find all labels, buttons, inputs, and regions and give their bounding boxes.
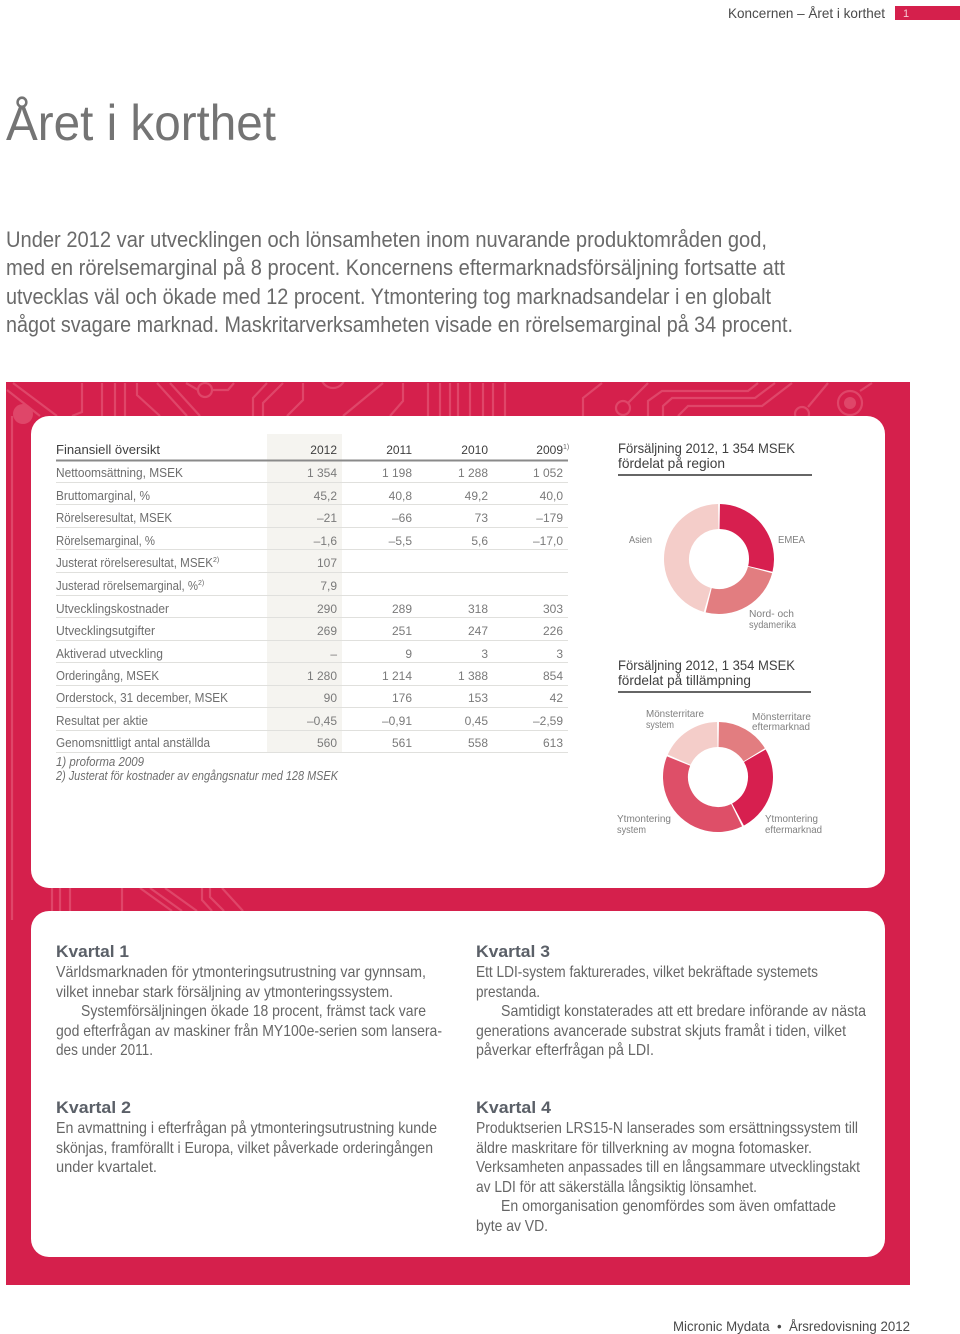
heading: sales by application: fördelat på tillämpning	[618, 672, 751, 688]
table footnotes: 1) proforma 2009	[56, 755, 144, 769]
row: Utvecklingsutgifter: 247	[468, 624, 488, 638]
row: Nettoomsättning: 1 198	[382, 466, 412, 480]
row: Nettoomsättning: 1 288	[458, 466, 488, 480]
row: Orderingång	[56, 669, 563, 683]
row: Utvecklingsutgifter: 226	[543, 624, 563, 638]
row: Utvecklingskostnader: 289	[392, 602, 412, 616]
text block: Kvartal 1: Kvartal 1	[56, 942, 129, 961]
donut labels: region: sydamerika	[749, 619, 796, 631]
text block: Kvartal 1: Systemförsäljningen ökade 18 procent, främst tack vare	[81, 1003, 426, 1020]
row: Nettoomsättning	[56, 466, 563, 480]
heading: sales by region: Försäljning 2012, 1 354 MSEK	[618, 440, 796, 456]
row: Rörelsemarginal: –1,6	[314, 534, 337, 548]
text block: Kvartal 1: Världsmarknaden för ytmonteringsutrustning var gynnsam,	[56, 964, 426, 981]
page footer: Micronic Mydata • Årsredovisning 2012	[673, 1318, 910, 1334]
row: Orderingång: 1 214	[382, 669, 412, 683]
donut labels: application: system	[617, 824, 646, 836]
page header: 1	[903, 8, 909, 20]
row: Orderstock: 176	[392, 691, 412, 705]
row: Rörelsemarginal: –17,0	[533, 534, 563, 548]
donut labels: application: eftermarknad	[765, 824, 822, 836]
row: Orderstock	[56, 691, 563, 705]
text block: Kvartal 4: av LDI för att säkerställa långsiktig lönsamhet.	[476, 1178, 757, 1196]
donut chart: sales by region	[666, 506, 772, 612]
row: Orderingång: Orderingång, MSEK	[56, 669, 160, 683]
financial table	[55, 434, 569, 783]
text block: Kvartal 1: god efterfrågan av maskiner från MY100e-serien som lansera-	[56, 1022, 442, 1040]
row: Rörelseresultat: –179	[536, 511, 563, 525]
text block: Kvartal 1: vilket innebar stark försäljning av ytmonteringssystem.	[56, 984, 393, 1001]
row: Orderingång: 1 388	[458, 669, 488, 683]
donut labels: application: system	[646, 719, 674, 731]
donut labels: application: Ytmontering	[765, 813, 818, 825]
row: Bruttomarginal: 40,0	[540, 489, 563, 503]
row: Bruttomarginal	[56, 489, 563, 503]
row: Utvecklingskostnader: Utvecklingskostnader	[56, 602, 169, 616]
table header: 2010	[461, 443, 488, 457]
page header: Koncernen – Året i korthet	[728, 5, 885, 21]
row: Justerad rörelsemarginal	[56, 579, 337, 593]
row: Utvecklingskostnader	[56, 602, 563, 616]
row: Resultat per aktie: –2,59	[533, 714, 563, 728]
row: Utvecklingsutgifter: 269	[317, 624, 337, 638]
row: Rörelseresultat: –21	[317, 511, 337, 525]
text block: Kvartal 4: Kvartal 4	[476, 1098, 552, 1117]
row: Utvecklingskostnader: 303	[543, 602, 563, 616]
text block: Kvartal 2	[56, 1098, 437, 1176]
red background panel	[6, 382, 910, 1285]
row: Justerad rörelsemarginal: 2)	[198, 580, 204, 587]
donut labels: region	[629, 534, 805, 631]
row: Aktiverad utveckling: –	[330, 647, 337, 661]
table header	[56, 443, 569, 457]
row: Resultat per aktie: –0,45	[307, 714, 337, 728]
row: Aktiverad utveckling: 3	[556, 647, 563, 661]
row: Orderingång: 1 280	[307, 669, 337, 683]
row: Rörelseresultat	[56, 511, 563, 525]
row: Justerad rörelsemarginal: 7,9	[320, 579, 337, 593]
row: Orderingång: 854	[543, 669, 563, 683]
table footnotes	[55, 755, 339, 783]
row: Bruttomarginal: 49,2	[465, 489, 488, 503]
heading: sales by application: Försäljning 2012, 1 354 MSEK	[618, 657, 796, 673]
donut labels: region: EMEA	[778, 534, 805, 546]
row: Orderstock: 153	[468, 691, 488, 705]
table header: 2012	[310, 443, 337, 457]
table footnotes: 2) Justerat för kostnader av engångsnatur med 128 MSEK	[55, 769, 339, 783]
row: Rörelsemarginal: Rörelsemarginal, %	[56, 534, 155, 548]
row: Genomsnittligt antal anställda: 613	[543, 736, 563, 750]
text block: Kvartal 4: Verksamheten anpassades till en långsammare utvecklingstakt	[476, 1158, 860, 1176]
donut labels: application: Mönsterritare	[752, 711, 811, 723]
row: Rörelseresultat: Rörelseresultat, MSEK	[56, 511, 173, 525]
heading: sales by application	[618, 657, 811, 693]
row: Aktiverad utveckling	[56, 647, 563, 661]
donut labels: application: Mönsterritare	[646, 708, 704, 720]
donut labels: application: eftermarknad	[752, 721, 810, 733]
panel: quarterly summaries	[31, 911, 885, 1257]
row: Utvecklingsutgifter	[56, 624, 563, 638]
row: Utvecklingskostnader: 290	[317, 602, 337, 616]
text block: Kvartal 4: En omorganisation genomfördes som även omfattade	[501, 1198, 836, 1215]
row: Bruttomarginal: 40,8	[389, 489, 412, 503]
row: Justerat rörelseresultat: 2)	[213, 557, 219, 564]
row: Justerat rörelseresultat: Justerat rörelseresultat, MSEK	[56, 556, 214, 570]
text block: Kvartal 3: Kvartal 3	[476, 942, 550, 961]
donut labels: application	[617, 708, 822, 836]
row: Justerad rörelsemarginal: Justerad rörelsemarginal, %	[56, 579, 198, 593]
text block: Kvartal 3: prestanda.	[476, 984, 540, 1001]
text block: Kvartal 3: Samtidigt konstaterades att ett bredare införande av nästa	[501, 1003, 866, 1020]
row: Genomsnittligt antal anställda: 558	[468, 736, 488, 750]
text block: Kvartal 2: Kvartal 2	[56, 1098, 131, 1117]
title: Året i korthet	[6, 95, 276, 151]
row: Justerat rörelseresultat	[56, 556, 337, 570]
text block: Kvartal 2: under kvartalet.	[56, 1159, 157, 1176]
row: Orderstock: 42	[550, 691, 563, 705]
row: Rörelsemarginal: 5,6	[471, 534, 488, 548]
donut labels: application: Ytmontering	[617, 813, 671, 825]
text block: Kvartal 2: skönjas, framförallt i Europa, vilket påverkade orderingången	[56, 1139, 433, 1157]
row: Resultat per aktie: –0,91	[382, 714, 412, 728]
row: Rörelseresultat: 73	[475, 511, 488, 525]
row: Nettoomsättning: 1 354	[307, 466, 337, 480]
intro text	[6, 227, 793, 337]
intro text: något svagare marknad. Maskritarverksamheten visade en rörelsemarginal på 34 procent.	[6, 312, 793, 337]
row: Aktiverad utveckling: 9	[405, 647, 412, 661]
intro text: med en rörelsemarginal på 8 procent. Koncernens eftermarknadsförsäljning fortsatte att	[6, 255, 786, 280]
donut labels: region: Nord- och	[749, 608, 794, 620]
row: Genomsnittligt antal anställda: 560	[317, 736, 337, 750]
table header: Finansiell översikt	[56, 443, 161, 457]
row: Nettoomsättning: 1 052	[533, 466, 563, 480]
row: Rörelsemarginal: –5,5	[389, 534, 412, 548]
row: Genomsnittligt antal anställda: Genomsnittligt antal anställda	[56, 736, 210, 750]
text block: Kvartal 1	[56, 942, 442, 1059]
table header: 2011	[386, 443, 412, 457]
table header: 2009	[536, 443, 563, 457]
row: Resultat per aktie: Resultat per aktie	[56, 714, 148, 728]
row: Rörelseresultat: –66	[392, 511, 412, 525]
text block: Kvartal 3	[476, 942, 866, 1059]
heading: sales by region: fördelat på region	[618, 455, 725, 471]
text block: Kvartal 3: påverkar efterfrågan på LDI.	[476, 1041, 654, 1059]
intro text: utvecklas väl och ökade med 12 procent. Ytmontering tog marknadsandelar i en globalt	[6, 284, 772, 309]
row: Resultat per aktie	[56, 714, 563, 728]
panel: financial overview and sales charts	[31, 416, 885, 888]
text block: Kvartal 4: byte av VD.	[476, 1218, 548, 1235]
row: Justerat rörelseresultat: 107	[317, 556, 337, 570]
text block: Kvartal 4	[476, 1098, 860, 1235]
row: Utvecklingsutgifter: Utvecklingsutgifter	[56, 624, 155, 638]
text block: Kvartal 3: Ett LDI-system fakturerades, vilket bekräftade systemets	[476, 964, 818, 981]
row: Rörelsemarginal	[56, 534, 563, 548]
row: Bruttomarginal: 45,2	[314, 489, 337, 503]
row: Aktiverad utveckling: Aktiverad utveckling	[56, 647, 163, 661]
row: Orderstock: 90	[324, 691, 337, 705]
row: Nettoomsättning: Nettoomsättning, MSEK	[56, 466, 184, 480]
row: Genomsnittligt antal anställda: 561	[392, 736, 412, 750]
donut chart: sales by application	[660, 719, 776, 835]
row: Bruttomarginal: Bruttomarginal, %	[56, 489, 150, 503]
row: Utvecklingskostnader: 318	[468, 602, 488, 616]
heading: sales by region	[618, 440, 812, 476]
table header: 1)	[563, 444, 569, 451]
row: Orderstock: Orderstock, 31 december, MSEK	[56, 691, 229, 705]
row: Aktiverad utveckling: 3	[481, 647, 488, 661]
row: Utvecklingsutgifter: 251	[392, 624, 412, 638]
text block: Kvartal 4: äldre maskritare för tillverkning av mogna fotomasker.	[476, 1140, 812, 1157]
text block: Kvartal 2: En avmattning i efterfrågan på ytmonteringsutrustning kunde	[56, 1119, 437, 1137]
text block: Kvartal 4: Produktserien LRS15-N lanserades som ersättningssystem till	[476, 1120, 858, 1137]
row: Genomsnittligt antal anställda	[56, 736, 563, 750]
row: Resultat per aktie: 0,45	[465, 714, 488, 728]
donut labels: region: Asien	[629, 534, 652, 546]
text block: Kvartal 1: des under 2011.	[56, 1042, 153, 1059]
intro text: Under 2012 var utvecklingen och lönsamheten inom nuvarande produktområden god,	[6, 227, 767, 252]
text block: Kvartal 3: generations avancerade substrat skjuts framåt i tiden, vilket	[476, 1022, 846, 1040]
